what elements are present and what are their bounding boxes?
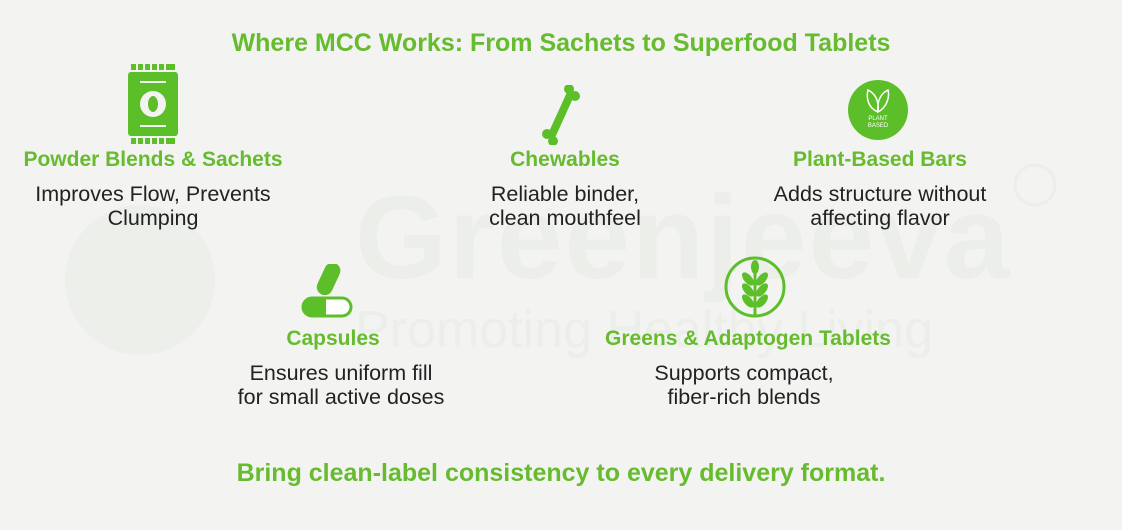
icon: sachet <box>128 64 178 144</box>
item: capsules <box>238 264 444 409</box>
item: powder blends <box>23 64 283 230</box>
icon: plant based badge <box>848 80 908 140</box>
icon: bone <box>542 85 580 145</box>
description <box>35 182 271 230</box>
description: Adds structure without <box>774 182 986 206</box>
description <box>654 361 834 409</box>
heading: Greens & Adaptogen Tablets <box>605 327 891 350</box>
icon: plant based badge: BASED <box>868 123 889 129</box>
heading: Capsules <box>286 327 380 350</box>
icon: capsule <box>302 264 352 318</box>
heading: Chewables <box>510 148 620 171</box>
watermark: Greenjeeva <box>355 172 1011 304</box>
item: greens tablets <box>605 256 891 409</box>
description: fiber-rich blends <box>668 385 820 409</box>
watermark: Promoting Healthy Living <box>355 301 933 359</box>
description: Ensures uniform fill <box>250 361 432 385</box>
item: chewables <box>489 85 641 230</box>
item: plant-based bars <box>774 80 986 230</box>
description: Supports compact, <box>654 361 834 385</box>
icon: wheat <box>724 256 786 318</box>
description: clean mouthfeel <box>489 206 641 230</box>
description: Reliable binder, <box>491 182 639 206</box>
footer tagline: Bring clean-label consistency to every delivery format. <box>237 459 885 487</box>
heading: Powder Blends & Sachets <box>23 148 283 171</box>
description: Clumping <box>108 206 198 230</box>
description: Improves Flow, Prevents <box>35 182 271 206</box>
heading: Plant-Based Bars <box>793 148 967 171</box>
description <box>238 361 444 409</box>
description <box>489 182 641 230</box>
title: Where MCC Works: From Sachets to Superfood Tablets <box>232 29 890 57</box>
icon: plant based badge: PLANT <box>868 116 888 122</box>
description: affecting flavor <box>810 206 950 230</box>
description: for small active doses <box>238 385 444 409</box>
description <box>774 182 986 230</box>
